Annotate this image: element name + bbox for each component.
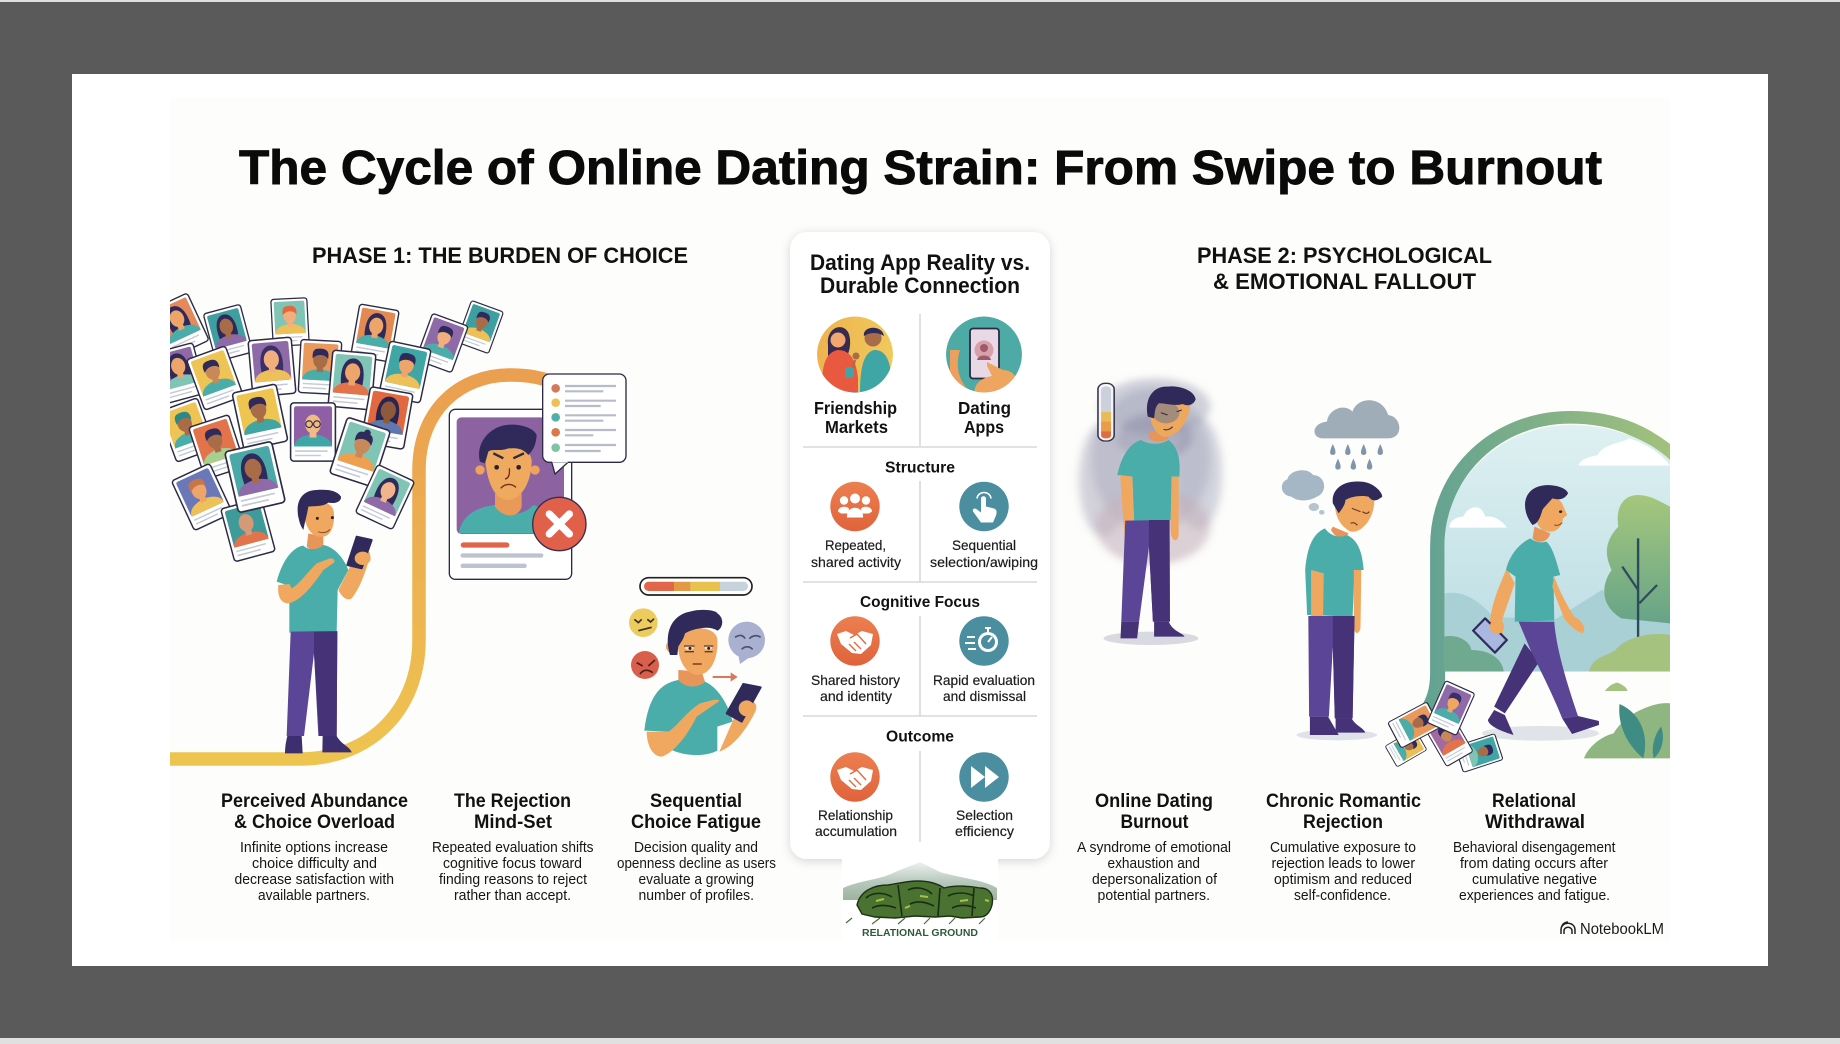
column: perceived abundance: Perceived Abundance — [221, 791, 408, 812]
column: sequential choice fatigue: Sequential — [650, 791, 742, 812]
icon: sad bubble — [728, 622, 765, 664]
section label: outcome: Outcome — [886, 728, 954, 746]
icon: stopwatch — [959, 616, 1009, 666]
icon: rain cloud — [1314, 400, 1399, 470]
profile card pile — [151, 293, 504, 562]
infographic panel — [170, 98, 1670, 940]
column: relational withdrawal: cumulative negative — [1472, 872, 1597, 888]
profile card — [271, 298, 309, 346]
column: chronic romantic rejection: self-confidence. — [1294, 888, 1391, 904]
profile card — [221, 498, 275, 562]
logo: relational ground — [842, 859, 998, 940]
section label: structure: Structure — [885, 460, 955, 476]
column: perceived abundance: decrease satisfaction with — [234, 872, 394, 888]
column: perceived abundance: Infinite options increase — [240, 840, 388, 856]
icon: reject cross — [533, 497, 586, 551]
icon: low battery thermometer — [1098, 383, 1114, 441]
icon: angry emoji — [631, 651, 659, 679]
person: burnout — [1079, 378, 1222, 645]
white slide — [72, 74, 1768, 966]
icon: swipe tap — [959, 482, 1009, 531]
icon: friendship markets — [817, 316, 893, 400]
profile card — [170, 293, 209, 348]
label: relationship accumulation: accumulation — [815, 823, 897, 839]
column: rejection mind-set — [432, 791, 594, 904]
column: sequential choice fatigue: openness decline as users — [617, 856, 776, 872]
top light strip — [0, 0, 1840, 2]
notebooklm watermark: NotebookLM — [1580, 921, 1664, 938]
profile card — [416, 313, 468, 373]
person: sequential choice fatigue — [629, 578, 765, 757]
label: rapid evaluation — [933, 672, 1035, 704]
profile card — [351, 304, 399, 362]
card heading: Dating App Reality vs. — [810, 250, 1030, 275]
label: shared history: Shared history — [811, 672, 900, 688]
rejected profile card — [449, 374, 626, 579]
column: perceived abundance: & Choice Overload — [234, 812, 395, 833]
burnout smoke aura — [1079, 378, 1222, 565]
phase 1 heading: PHASE 1: THE BURDEN OF CHOICE — [312, 243, 688, 268]
swipe path arrow — [165, 375, 552, 759]
profile card — [361, 387, 413, 449]
column: perceived abundance — [221, 791, 408, 904]
column: chronic romantic rejection: rejection leads to lower — [1272, 856, 1415, 872]
column: chronic romantic rejection: Chronic Romantic — [1266, 791, 1421, 812]
logo wordmark: RELATIONAL GROUND — [862, 928, 978, 939]
column: chronic romantic rejection: optimism and reduced — [1274, 872, 1412, 888]
label: relationship accumulation: Relationship — [818, 807, 893, 823]
foreground bush — [1584, 703, 1670, 758]
profile card — [225, 441, 285, 513]
fatigue meter — [640, 578, 752, 595]
icon: dating apps — [946, 316, 1022, 396]
column: relational withdrawal: experiences and fatigue. — [1459, 888, 1610, 904]
label: repeated shared activity — [811, 537, 901, 570]
profile card — [1388, 702, 1440, 748]
profile card — [170, 398, 206, 462]
column: chronic romantic rejection — [1266, 791, 1421, 904]
label: dating apps — [958, 398, 1011, 437]
column: sequential choice fatigue — [617, 791, 776, 904]
label: relationship accumulation — [815, 807, 897, 839]
panel: phase 2 illustration — [1079, 378, 1679, 772]
label: friendship markets: Markets — [825, 417, 888, 437]
column: chronic romantic rejection: Cumulative exposure to — [1270, 840, 1416, 856]
column: relational withdrawal: Behavioral disengagement — [1453, 840, 1616, 856]
walking person — [1473, 485, 1599, 735]
icon: handshake — [830, 616, 880, 666]
icon: fast forward — [959, 752, 1009, 802]
profile card — [1455, 734, 1503, 772]
column: online dating burnout: Online Dating — [1095, 791, 1213, 812]
column: sequential choice fatigue: evaluate a growing — [638, 872, 754, 888]
label: repeated shared activity: Repeated, — [825, 537, 886, 553]
card heading: Durable Connection — [820, 273, 1020, 298]
arch window with landscape — [1428, 417, 1679, 710]
label: friendship markets: Friendship — [814, 398, 897, 418]
icon: thought cloud — [1282, 470, 1325, 515]
icon: handshake — [830, 752, 880, 802]
label: sequential selection: Sequential — [952, 537, 1016, 553]
profile card — [462, 300, 504, 354]
column: rejection mind-set: cognitive focus toward — [443, 856, 582, 872]
section label: cognitive focus: Cognitive Focus — [860, 594, 980, 611]
label: repeated shared activity: shared activity — [811, 554, 901, 570]
label: shared history: and identity — [820, 688, 892, 704]
phase 2 heading: & EMOTIONAL FALLOUT — [1213, 269, 1476, 294]
profile card — [170, 342, 199, 404]
card: dating app reality comparison — [790, 232, 1050, 859]
profile card — [329, 417, 391, 487]
column: rejection mind-set: Mind-Set — [474, 812, 553, 833]
card heading — [810, 250, 1030, 298]
phase 2 heading: PHASE 2: PSYCHOLOGICAL — [1197, 243, 1492, 268]
profile card — [203, 304, 253, 362]
panel: phase 1 illustration — [151, 293, 626, 759]
profile card — [1425, 713, 1473, 767]
label: selection efficiency: efficiency — [955, 823, 1014, 839]
profile card — [379, 341, 431, 403]
column: relational withdrawal: Withdrawal — [1485, 812, 1585, 833]
column: online dating burnout — [1077, 791, 1231, 904]
column: perceived abundance: available partners. — [258, 888, 370, 904]
label: dating apps: Apps — [964, 417, 1004, 437]
profile card — [186, 346, 244, 410]
column: online dating burnout: potential partners. — [1098, 888, 1210, 904]
arrow — [713, 672, 738, 682]
profile card — [355, 464, 415, 530]
label: selection efficiency — [955, 807, 1014, 839]
profile card: bald with glasses — [291, 403, 335, 461]
speech bubble: reasons list — [543, 374, 626, 474]
phase 2 heading — [1197, 243, 1492, 294]
label: sequential selection: selection/awiping — [930, 554, 1038, 570]
label: shared history — [811, 672, 900, 704]
profile card — [328, 350, 376, 410]
column: online dating burnout: Burnout — [1120, 812, 1189, 833]
icon: small tuft — [1605, 683, 1627, 691]
profile card — [1427, 681, 1475, 735]
profile card — [171, 463, 233, 531]
label: sequential selection — [930, 537, 1038, 570]
label: rapid evaluation: and dismissal — [943, 688, 1026, 704]
title: The Cycle of Online Dating Strain: From Swipe to Burnout — [239, 142, 1602, 195]
profile card — [298, 339, 342, 395]
walking out through arch — [1428, 417, 1679, 758]
column: online dating burnout: A syndrome of emotional — [1077, 840, 1231, 856]
icon: group — [830, 482, 880, 531]
column: online dating burnout: depersonalization of — [1092, 872, 1218, 888]
person: browsing on phone — [277, 490, 372, 753]
column: online dating burnout: exhaustion and — [1108, 856, 1200, 872]
column: rejection mind-set: finding reasons to reject — [439, 872, 587, 888]
column: relational withdrawal: Relational — [1492, 791, 1576, 812]
icon: tired emoji — [629, 608, 658, 637]
column: sequential choice fatigue: number of profiles. — [638, 888, 754, 904]
column: rejection mind-set: The Rejection — [454, 791, 571, 812]
profile card — [248, 337, 296, 397]
profile card — [1385, 729, 1427, 767]
profile card — [232, 384, 288, 450]
profile card — [188, 414, 240, 477]
column: sequential choice fatigue: Choice Fatigue — [631, 812, 761, 833]
person: chronic rejection — [1282, 400, 1399, 740]
column: perceived abundance: choice difficulty and — [252, 856, 377, 872]
label: friendship markets — [814, 398, 897, 437]
column: rejection mind-set: Repeated evaluation shifts — [432, 840, 594, 856]
column: rejection mind-set: rather than accept. — [454, 888, 571, 904]
label: selection efficiency: Selection — [956, 807, 1013, 823]
column: chronic romantic rejection: Rejection — [1303, 812, 1383, 833]
column: relational withdrawal: from dating occurs after — [1460, 856, 1608, 872]
column: sequential choice fatigue: Decision quality and — [634, 840, 758, 856]
label: dating apps: Dating — [958, 398, 1011, 418]
discarded profile cards — [1385, 681, 1503, 772]
bottom light strip — [0, 1038, 1840, 1044]
column: relational withdrawal — [1453, 791, 1616, 904]
label: rapid evaluation: Rapid evaluation — [933, 672, 1035, 688]
